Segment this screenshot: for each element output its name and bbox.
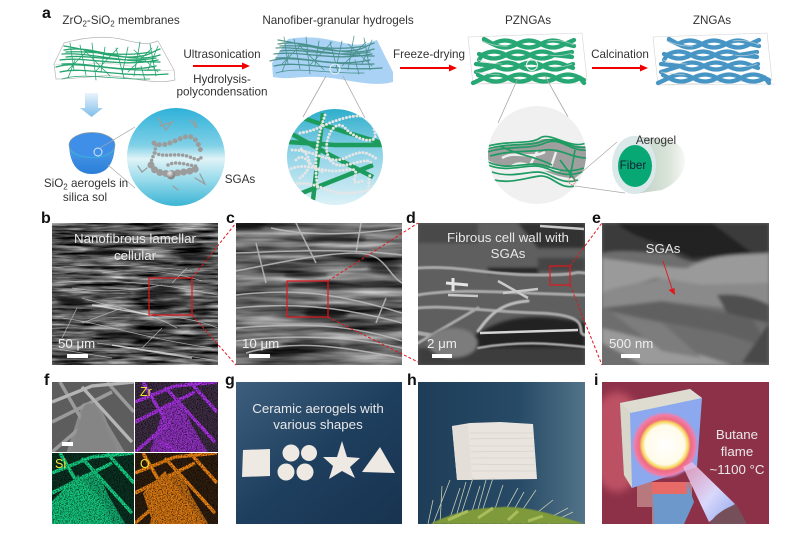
subtitle b: cellular — [114, 248, 157, 263]
red zoom guides — [192, 223, 602, 365]
background — [602, 382, 769, 524]
process text: ultrasonication: Ultrasonication — [183, 48, 261, 61]
title b: Nanofibrous lamellar — [74, 231, 197, 246]
label g: g — [225, 372, 235, 389]
ZNGA lattice — [653, 33, 775, 85]
heading: ZrO2-SiO2 membranes: membranes — [115, 14, 180, 27]
label: fiber: Fiber — [620, 159, 646, 172]
process text: calcination: Calcination — [591, 48, 649, 61]
heading: ZrO2-SiO2 membranes: 2 — [110, 20, 115, 28]
label: SiO2 aerogels: SiO — [44, 177, 63, 190]
map label Si: Si — [55, 457, 66, 471]
label: SiO2 aerogels: silica sol — [63, 191, 107, 204]
label b: b — [41, 210, 51, 227]
Si tile — [52, 453, 134, 524]
red arrow e — [663, 261, 675, 295]
zoom lines hydrogel — [303, 76, 365, 118]
label d: d — [406, 210, 416, 227]
label e: e — [592, 210, 601, 227]
heading: ZNGAs: ZNGAs — [693, 14, 731, 27]
process text: hydrolysis: polycondensation — [177, 86, 267, 98]
heading: hydrogels: Nanofiber-granular hydrogels — [262, 14, 414, 27]
scale bar b — [67, 354, 88, 358]
glow — [631, 411, 699, 479]
holder — [637, 482, 694, 524]
process text: hydrolysis: Hydrolysis- — [193, 73, 251, 86]
title d: Fibrous cell wall with — [447, 230, 569, 245]
scale e: 500 nm — [609, 336, 653, 351]
arrow: ultrasonication — [193, 62, 250, 70]
panel: d SEM — [406, 210, 585, 365]
panel: b SEM — [41, 210, 218, 365]
O tile — [135, 453, 218, 524]
circle: cell wall magnified — [487, 106, 588, 204]
panel: i flame test — [589, 372, 769, 524]
label: SiO2 aerogels: aerogels in — [68, 177, 128, 190]
circle: SGAs magnified — [127, 108, 225, 206]
red box d — [550, 266, 570, 285]
label f: f — [44, 372, 50, 389]
map label Zr: Zr — [140, 385, 152, 399]
caption i: Butane — [716, 427, 758, 442]
caption i: flame — [721, 444, 753, 459]
panel: h block on plant — [407, 372, 585, 524]
scale bar e — [621, 354, 640, 358]
label h: h — [407, 372, 417, 389]
scale d: 2 μm — [427, 336, 457, 351]
caption g: Ceramic aerogels with — [252, 401, 384, 416]
heading: ZrO2-SiO2 membranes: ZrO — [62, 14, 82, 27]
panel: a schematic — [42, 5, 775, 206]
heading: PZNGAs: PZNGAs — [505, 14, 551, 27]
nozzle — [709, 504, 747, 524]
label i: i — [594, 372, 598, 389]
aerogel block — [452, 422, 537, 480]
panel: f elemental maps — [44, 372, 218, 525]
fiber-aerogel cylinder — [575, 136, 685, 194]
Zr tile — [135, 382, 218, 452]
heading: ZrO2-SiO2 membranes: 2 — [82, 20, 87, 28]
subtitle d: SGAs — [491, 246, 526, 261]
panel: c SEM — [226, 210, 404, 365]
zoom lines PZNGA — [498, 76, 568, 123]
process text: freeze-drying: Freeze-drying — [393, 48, 465, 61]
red box b — [149, 278, 192, 315]
bowl with silica sol — [69, 127, 135, 188]
label c: c — [226, 210, 235, 227]
label a: a — [42, 5, 51, 22]
photo background — [418, 382, 585, 524]
scale b: 50 μm — [58, 336, 95, 351]
flame — [683, 462, 735, 522]
arrow: calcination — [592, 64, 648, 72]
scale bar c — [249, 354, 270, 358]
hydrogel illustration — [270, 36, 393, 84]
label: SGAs: SGAs — [225, 173, 255, 186]
SEM tile — [52, 382, 134, 452]
scale c: 10 μm — [242, 336, 279, 351]
label: SiO2 aerogels: 2 — [63, 182, 68, 192]
scale bar d — [432, 354, 452, 358]
arrow: blue down — [80, 93, 103, 117]
red box c — [287, 281, 328, 317]
PZNGA lattice — [468, 33, 587, 84]
title e: SGAs — [646, 241, 681, 256]
block — [620, 389, 702, 488]
photo background — [236, 382, 402, 524]
caption i: ~1100 °C — [710, 462, 765, 477]
heading: ZrO2-SiO2 membranes: -SiO — [87, 14, 110, 27]
arrow: freeze-drying — [400, 64, 457, 72]
map label O: O — [140, 457, 150, 471]
label: aerogel: Aerogel — [636, 134, 676, 147]
membrane illustration — [54, 37, 175, 82]
plant — [428, 478, 584, 524]
panel: g shapes photo — [225, 372, 402, 524]
circle: nanofiber granular magnified — [287, 109, 383, 205]
aerogel shapes — [242, 441, 395, 480]
panel: e SEM — [592, 210, 769, 365]
caption g: various shapes — [273, 417, 363, 432]
